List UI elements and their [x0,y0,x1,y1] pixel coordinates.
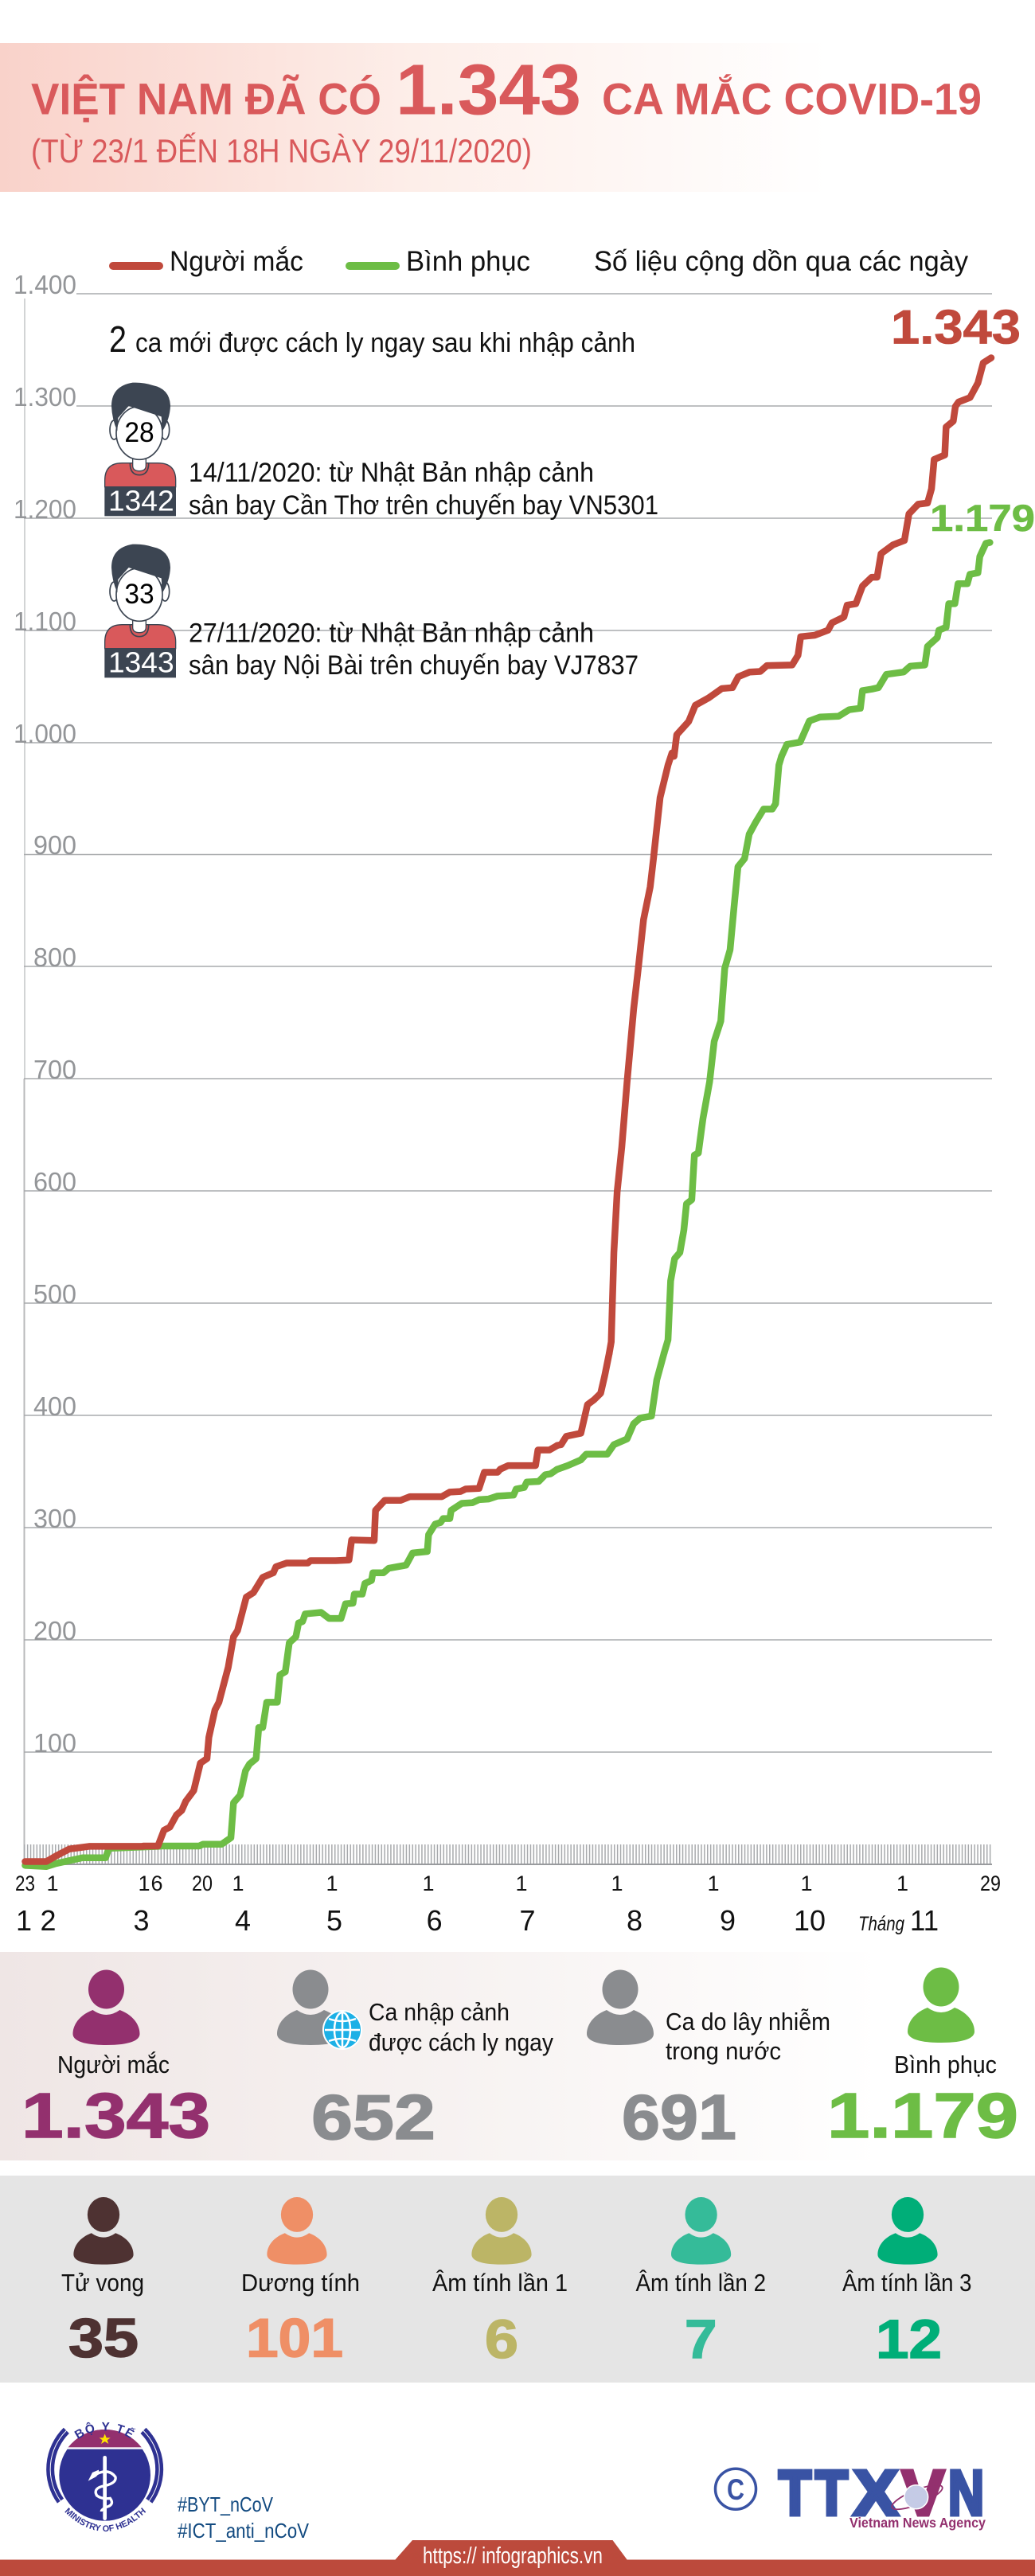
x axis day labels: 1 [707,1872,720,1895]
x axis month labels: 8 [627,1904,642,1937]
x axis day labels: 1 [515,1872,528,1895]
logo: TTXVN: V [902,2457,944,2528]
y axis labels: 200 [33,1616,76,1645]
y axis labels: 900 [33,830,76,860]
patient 1343 icon: 33 [124,579,154,610]
x axis month labels: 7 [519,1904,535,1937]
hashtags: #BYT_nCoV [178,2492,274,2516]
x axis day labels: 1 [800,1872,813,1895]
patient 1342 text: 14/11/2020: từ Nhật Bản nhập cảnh [189,458,594,488]
legend note: Số liệu cộng dồn qua các ngày [594,246,968,277]
x axis day labels: 1 [232,1872,244,1895]
patient 1342 text: sân bay Cần Thơ trên chuyến bay VN5301 [189,490,658,521]
footer bar [0,2540,1035,2576]
stat: người mắc: Người mắc [57,2051,170,2078]
patient 1343 icon [104,544,176,679]
stat: dương tính [241,2197,360,2369]
y axis labels: 800 [33,943,76,972]
x axis month labels: 1 [16,1904,32,1937]
cases line (red) [25,358,991,1862]
x axis month labels: 6 [427,1904,443,1937]
x axis month labels: 3 [134,1904,150,1937]
x axis month labels: 9 [720,1904,736,1937]
y axis labels: 700 [33,1055,76,1084]
logo: TTXVN: N [948,2457,984,2528]
x axis day labels: 1 [611,1872,623,1895]
note heading: 2 [109,318,127,360]
patient 1343 icon: 1343 [108,646,174,679]
x axis day labels: 29 [980,1872,1001,1895]
end value: cases: 1.343 [891,301,1021,353]
x axis month labels: 5 [326,1904,342,1937]
stat: ca nhập cảnh: 652 [311,2082,435,2153]
stat: âm tính lần 1: Âm tính lần 1 [432,2269,568,2297]
stat: âm tính lần 2 [635,2197,766,2370]
logo: TTXVN: T [815,2457,848,2528]
stat: dương tính: Dương tính [241,2269,360,2297]
stat: ca lây nhiễm trong nước [587,1969,830,2153]
panel: totals [0,1952,1035,2160]
stat: tử vong: Tử vong [61,2269,144,2297]
note heading [109,318,635,360]
patient 1342 icon: 28 [124,417,154,448]
title [31,51,982,131]
stat: người mắc [21,1969,210,2151]
x axis month labels: 4 [235,1904,251,1937]
subtitle: (TỪ 23/1 ĐẾN 18H NGÀY 29/11/2020) [31,132,532,170]
stat: bình phục [827,1968,1018,2151]
hashtags [178,2492,310,2543]
logo: Bộ Y tế [46,2422,164,2531]
logo: TTXVN: Vietnam News Agency [849,2515,986,2531]
logo: Bộ Y tế: BỘ Y TẾ [74,2422,135,2439]
title: 1.343 [396,51,581,131]
stat: người mắc: 1.343 [21,2080,210,2151]
end value: recovered: 1.179 [930,498,1035,540]
stat: ca lây nhiễm trong nước: Ca do lây nhiễm [666,2008,830,2035]
stat: ca lây nhiễm trong nước: trong nước [666,2037,781,2065]
logo: Bộ Y tế: MINISTRY OF HEALTH [64,2508,146,2531]
y axis labels: 300 [33,1504,76,1533]
patient 1342 icon: 1342 [108,485,174,517]
legend [113,246,968,277]
stat: ca nhập cảnh: Ca nhập cảnh [369,1998,510,2026]
title: CA MẮC COVID-19 [602,73,982,124]
x axis day labels: 1 [46,1872,59,1895]
x axis day labels: 16 [139,1872,162,1895]
recovered line (green) [25,542,990,1867]
x axis month labels: Tháng [858,1913,904,1935]
panel: status [0,2176,1035,2383]
title: VIỆT NAM ĐÃ CÓ [31,73,381,124]
new cases note [104,318,658,681]
y axis labels: 600 [33,1167,76,1196]
stat: bình phục: Bình phục [894,2051,997,2078]
y axis labels: 1.300 [14,382,76,412]
x axis day labels [15,1872,1001,1895]
y axis labels [14,270,76,1758]
legend: người mắc: Người mắc [170,246,303,277]
logo: TTXVN [779,2457,986,2531]
x axis month labels: 2 [40,1904,56,1937]
patient 1342 icon [104,383,176,517]
y axis labels: 1.200 [14,494,76,524]
header band [0,43,1035,192]
y axis labels: 1.400 [14,270,76,299]
stat: dương tính: 101 [246,2307,343,2369]
line chart [14,270,1035,1937]
x axis day labels: 1 [896,1872,908,1895]
stat: tử vong [61,2197,144,2369]
stat: âm tính lần 3: 12 [876,2309,942,2370]
x axis day labels: 1 [422,1872,435,1895]
y axis labels: 500 [33,1279,76,1309]
y axis labels: 100 [33,1728,76,1758]
stat: âm tính lần 1: 6 [485,2309,518,2370]
x axis month labels [16,1904,939,1937]
stat: ca lây nhiễm trong nước: 691 [622,2082,736,2153]
patient 1343 text: 27/11/2020: từ Nhật Bản nhập cảnh [189,618,594,648]
copyright mark [715,2469,756,2509]
hashtags: #ICT_anti_nCoV [178,2519,310,2543]
copyright mark: C [727,2473,744,2506]
stat: âm tính lần 1 [432,2197,568,2370]
stat: tử vong: 35 [68,2307,139,2369]
y axis labels: 1.000 [14,719,76,748]
y axis labels: 1.100 [14,607,76,636]
patient 1343 text [189,618,639,681]
patient 1343 text: sân bay Nội Bài trên chuyến bay VJ7837 [189,650,639,681]
stat: âm tính lần 3 [842,2197,971,2370]
legend: bình phục: Bình phục [406,246,530,277]
x axis day labels: 20 [192,1872,213,1895]
stat: bình phục: 1.179 [827,2080,1018,2151]
patient 1342 text [189,458,658,521]
icon: globe [323,2011,361,2049]
stat: ca nhập cảnh [277,1969,553,2153]
stat: âm tính lần 2: 7 [685,2309,717,2370]
y axis labels: 400 [33,1391,76,1421]
note heading: ca mới được cách ly ngay sau khi nhập cảnh [135,328,635,358]
x axis day labels: 23 [15,1872,35,1895]
stat: ca nhập cảnh: được cách ly ngay [369,2028,553,2056]
x axis day labels: 1 [326,1872,338,1895]
logo: TTXVN: X [853,2457,898,2528]
logo: TTXVN: T [779,2457,811,2528]
x axis month labels: 11 [910,1904,939,1937]
x axis month labels: 10 [794,1904,826,1937]
stat: âm tính lần 2: Âm tính lần 2 [635,2269,766,2297]
footer url: https:// infographics.vn [423,2543,603,2569]
stat: âm tính lần 3: Âm tính lần 3 [842,2269,971,2297]
